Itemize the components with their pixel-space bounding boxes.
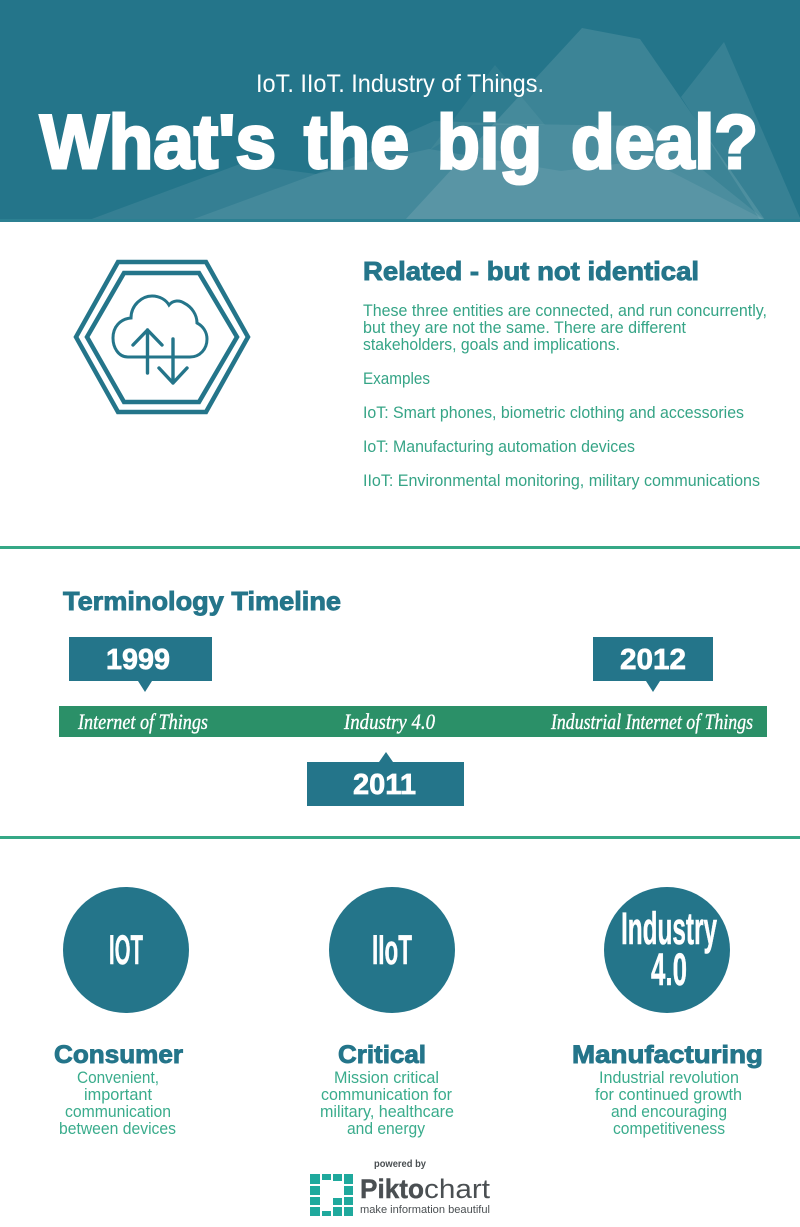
description: consumer: between devices bbox=[59, 1119, 176, 1138]
heading: Terminology Timeline bbox=[63, 586, 341, 616]
text block: description and examples: Examples bbox=[363, 369, 430, 388]
text block: description and examples: IoT: Smart phones, biometric clothing and accessories bbox=[363, 403, 744, 422]
timeline bar: Internet of Things bbox=[77, 709, 208, 734]
description: manufacturing bbox=[595, 1068, 742, 1138]
marker: 2011: 2011 bbox=[353, 769, 416, 801]
header banner bbox=[0, 0, 800, 222]
panel: related but not identical bbox=[363, 256, 767, 490]
footer: piktochart logo bbox=[310, 1159, 491, 1216]
description: manufacturing: and encouraging bbox=[611, 1102, 727, 1121]
circle: IIoT: IIoT bbox=[372, 926, 412, 973]
description: consumer: important bbox=[84, 1085, 152, 1104]
subtitle: IoT. IIoT. Industry of Things. bbox=[256, 70, 544, 98]
panel: terminology timeline bbox=[59, 586, 767, 806]
wordmark: make information beautiful bbox=[360, 1204, 490, 1216]
circle: IIoT bbox=[329, 887, 455, 1013]
text block: description and examples bbox=[363, 301, 767, 490]
description: consumer: communication bbox=[65, 1102, 171, 1121]
text block: description and examples: IIoT: Environmental monitoring, military communications bbox=[363, 471, 760, 490]
heading: manufacturing: Manufacturing bbox=[572, 1041, 763, 1069]
circle: industry 4.0: Industry bbox=[621, 903, 717, 954]
circle: IOT bbox=[63, 887, 189, 1013]
title: What's bbox=[40, 100, 276, 185]
timeline bar: Industry 4.0 bbox=[343, 709, 435, 734]
circle: industry 4.0 bbox=[604, 887, 730, 1013]
description: critical: and energy bbox=[347, 1119, 425, 1138]
title: big bbox=[437, 100, 542, 185]
wordmark bbox=[360, 1174, 491, 1216]
description: critical: communication for bbox=[321, 1085, 452, 1104]
description: critical: Mission critical bbox=[334, 1068, 439, 1087]
wordmark: Pikto bbox=[360, 1174, 424, 1204]
circle: IOT: IOT bbox=[109, 926, 143, 973]
heading: critical: Critical bbox=[338, 1041, 426, 1069]
title: the bbox=[304, 100, 409, 185]
marker: 2012 bbox=[593, 637, 713, 692]
description: critical bbox=[320, 1068, 454, 1138]
text block: description and examples: stakeholders, goals and implications. bbox=[363, 335, 620, 354]
marker: 2011 bbox=[307, 752, 464, 806]
marker: 1999: 1999 bbox=[106, 644, 170, 676]
description: manufacturing: competitiveness bbox=[613, 1119, 725, 1138]
marker: 1999 bbox=[69, 637, 212, 692]
panel: IoT consumer bbox=[54, 887, 189, 1138]
heading: Related - but not identical bbox=[363, 256, 699, 286]
circle: industry 4.0: 4.0 bbox=[651, 944, 687, 995]
text block: description and examples: but they are not the same. There are different bbox=[363, 318, 686, 337]
panel: industry 4.0 manufacturing bbox=[572, 887, 763, 1138]
description: manufacturing: for continued growth bbox=[595, 1085, 742, 1104]
text block: description and examples: These three entities are connected, and run concurrently, bbox=[363, 301, 767, 320]
timeline bar: Industrial Internet of Things bbox=[550, 709, 753, 734]
panel: IIoT critical bbox=[320, 887, 455, 1138]
description: critical: military, healthcare bbox=[320, 1102, 454, 1121]
wordmark: chart bbox=[424, 1174, 491, 1204]
timeline bar bbox=[59, 706, 767, 737]
text block: description and examples: IoT: Manufacturing automation devices bbox=[363, 437, 635, 456]
powered by: powered by bbox=[374, 1159, 426, 1170]
description: consumer: Convenient, bbox=[77, 1068, 159, 1087]
title bbox=[40, 100, 758, 185]
icon: logo squares bbox=[310, 1174, 353, 1216]
description: manufacturing: Industrial revolution bbox=[599, 1068, 739, 1087]
description: consumer bbox=[59, 1068, 176, 1138]
icon: cloud in hexagon bbox=[76, 262, 248, 412]
marker: 2012: 2012 bbox=[620, 644, 686, 676]
title: deal? bbox=[571, 100, 758, 185]
heading: consumer: Consumer bbox=[54, 1041, 183, 1069]
